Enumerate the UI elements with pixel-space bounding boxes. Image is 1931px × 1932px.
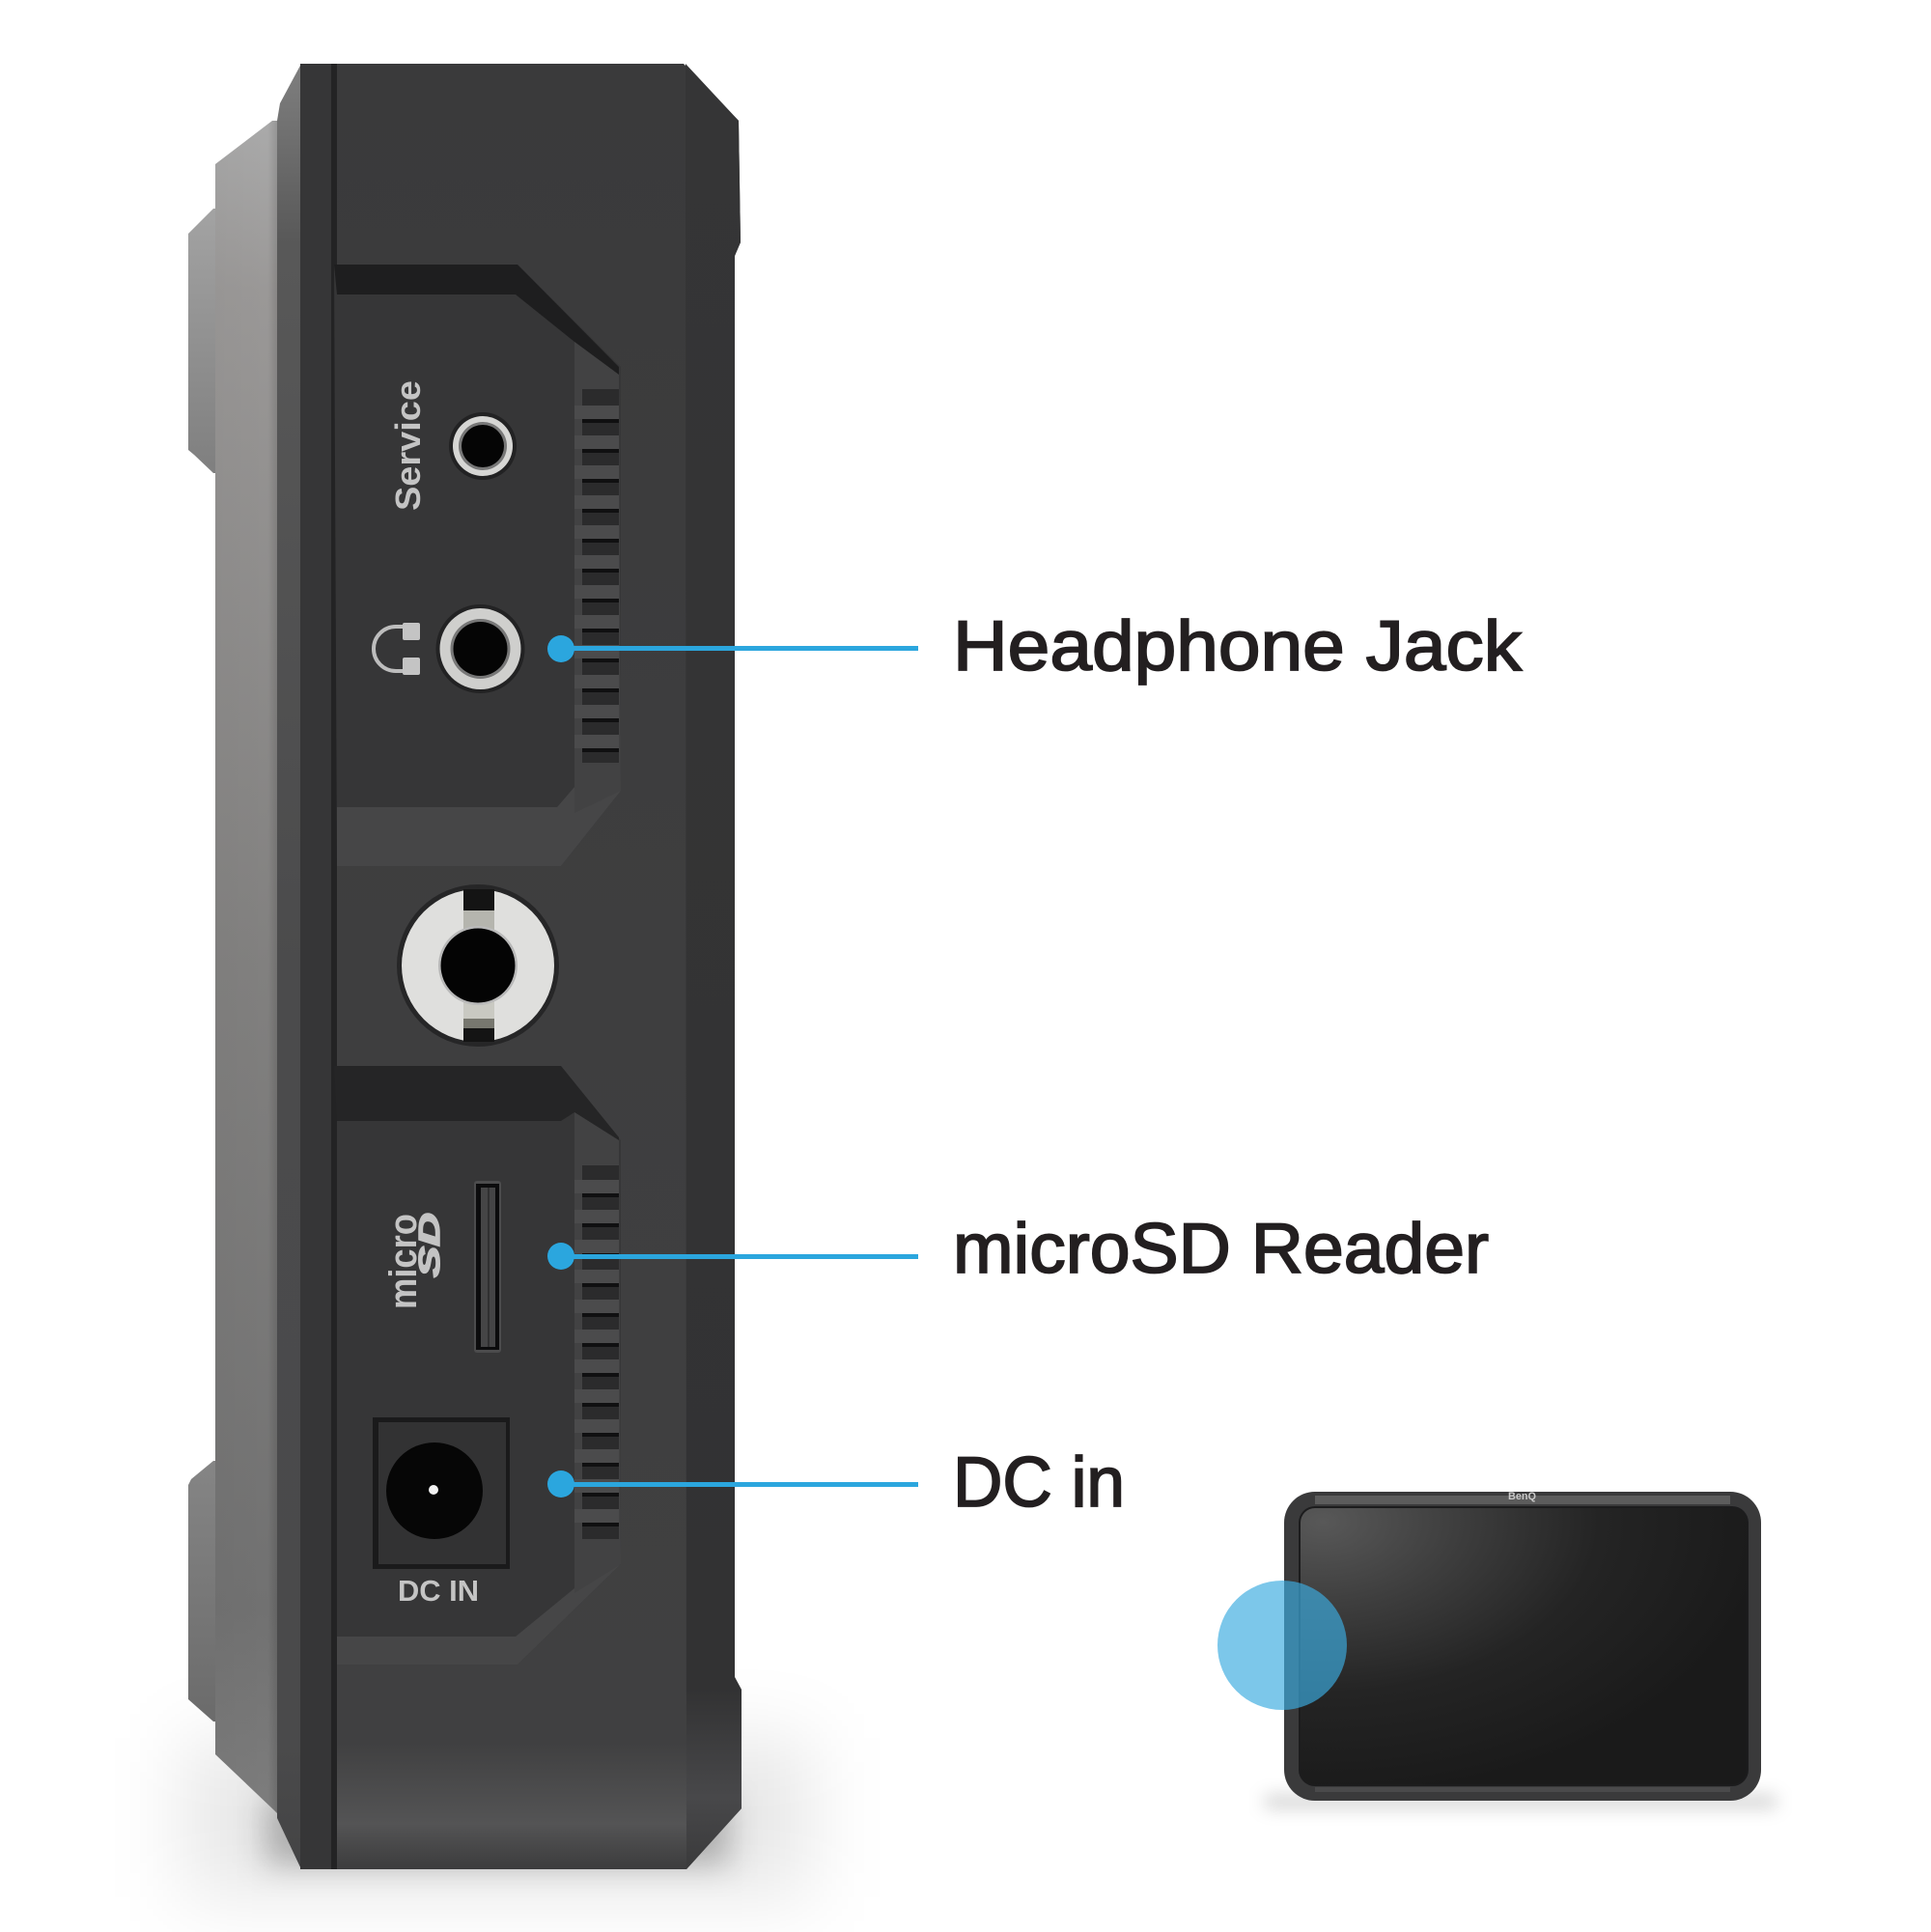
upper recessed port panel <box>334 265 621 866</box>
label: Service: Service <box>388 380 428 511</box>
microSD logo <box>382 1213 446 1309</box>
BenQ logo: BenQ <box>1508 1491 1536 1502</box>
vent teeth strip <box>574 1112 621 1593</box>
callout: DC in <box>547 1443 1125 1522</box>
device ground shadow <box>183 1738 811 1897</box>
frame bottom highlight <box>1315 1787 1730 1792</box>
DC in socket <box>373 1417 510 1569</box>
recess top shadow band <box>334 265 619 375</box>
recess bottom lit band <box>337 1564 621 1665</box>
headphone icon <box>374 623 420 675</box>
recess top shadow band <box>334 1066 619 1140</box>
callout: microSD Reader <box>547 1210 1489 1288</box>
grey monitor rear bumps <box>188 209 216 1722</box>
microSD logo: micro <box>382 1214 425 1309</box>
monitor screen <box>1301 1508 1747 1784</box>
microSD logo: SD <box>412 1213 446 1277</box>
monitor ground shadow <box>1265 1796 1777 1807</box>
frame inner edge <box>1299 1506 1749 1786</box>
microSD slot <box>474 1181 501 1353</box>
grey monitor rear shell <box>215 121 277 1813</box>
callout: Headphone Jack: Headphone Jack <box>953 607 1523 686</box>
right rounded side strip <box>686 64 742 1869</box>
callout: Headphone Jack <box>547 607 1523 686</box>
headphone jack <box>436 604 525 693</box>
vent teeth strip <box>574 342 621 813</box>
highlight circle marking port side <box>1217 1581 1347 1710</box>
lower recessed port panel <box>334 1066 621 1665</box>
small monitor front view <box>1265 1491 1777 1807</box>
main device: monitor seen from the side <box>183 64 811 1897</box>
frame top highlight <box>1315 1496 1730 1504</box>
monitor frame <box>1284 1492 1761 1801</box>
recess bottom lit band <box>337 787 621 866</box>
main side body <box>337 64 742 1869</box>
dark left bezel <box>277 64 338 1869</box>
label: DC IN: DC IN <box>398 1574 479 1608</box>
mounting screw socket <box>397 884 559 1047</box>
service jack <box>449 412 517 480</box>
callout: DC in: DC in <box>953 1443 1125 1522</box>
callout: microSD Reader: microSD Reader <box>953 1210 1489 1288</box>
